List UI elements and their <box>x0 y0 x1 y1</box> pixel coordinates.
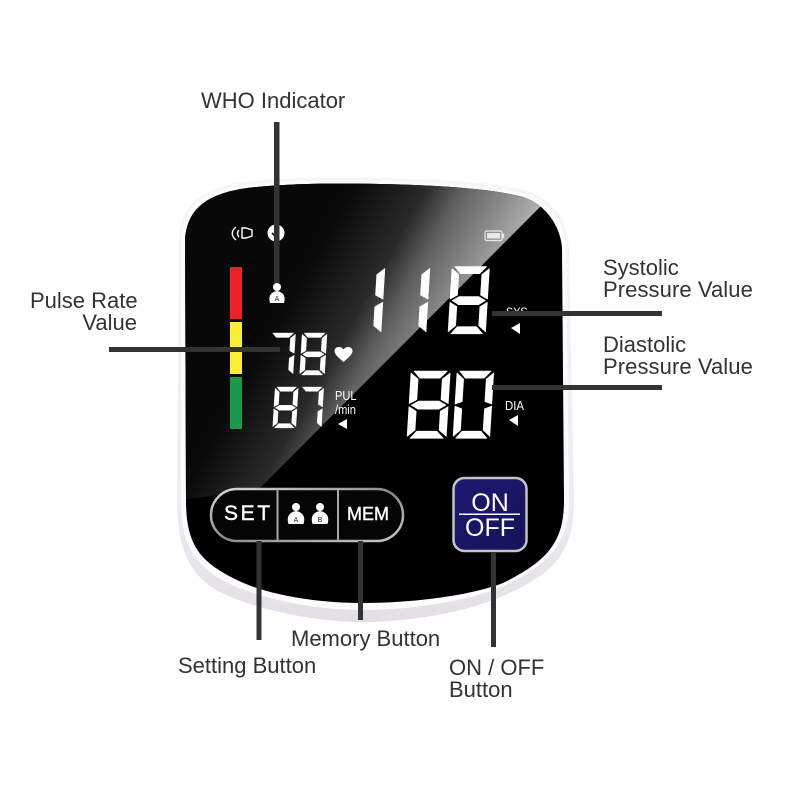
DIA label: DIA <box>505 398 525 413</box>
pulse reading <box>270 333 327 375</box>
PUL per min label: PUL <box>335 388 357 403</box>
button group: SET, user, MEM <box>211 489 403 541</box>
PUL per min label: /min <box>335 402 356 417</box>
callout: Systolic Pressure Value: Systolic <box>603 255 679 280</box>
systolic reading <box>373 266 490 334</box>
callout: ON / OFF Button <box>449 552 544 702</box>
DIA label <box>505 398 525 426</box>
callout: Memory Button <box>291 541 440 651</box>
screen glare <box>180 170 541 500</box>
callout: WHO Indicator <box>201 88 345 283</box>
callout: Setting Button <box>178 541 316 678</box>
icon: speaker <box>232 227 252 240</box>
second reading <box>273 387 324 428</box>
callout: Systolic Pressure Value: Pressure Value <box>603 277 753 302</box>
monitor device <box>177 170 574 622</box>
black screen <box>185 183 564 603</box>
device body <box>177 177 574 622</box>
callout: ON / OFF Button: Button <box>449 677 513 702</box>
SET button: SET <box>224 502 273 525</box>
icon: battery <box>485 231 504 240</box>
callout: Diastolic Pressure Value <box>492 332 753 390</box>
callout: ON / OFF Button: ON / OFF <box>449 655 544 680</box>
icon: users A and B: B <box>318 517 323 524</box>
SYS label: SYS <box>506 307 528 319</box>
callout: WHO Indicator: WHO Indicator <box>201 88 345 113</box>
icon: heart <box>334 347 352 362</box>
icon: user A: A <box>275 296 280 303</box>
callout: Pulse Rate Value: Pulse Rate <box>30 288 138 313</box>
callout: Setting Button: Setting Button <box>178 653 316 678</box>
callout: Diastolic Pressure Value: Pressure Value <box>603 354 753 379</box>
icon: user A <box>269 283 285 303</box>
callout: Pulse Rate Value: Value <box>82 310 137 335</box>
WHO colour scale <box>230 267 242 429</box>
callout: Systolic Pressure Value <box>492 255 753 316</box>
diastolic reading <box>407 371 494 438</box>
icon: check circle <box>268 224 284 242</box>
ON/OFF button: OFF <box>465 514 515 542</box>
icon: users A and B: A <box>294 517 299 524</box>
callout: Pulse Rate Value <box>30 288 280 352</box>
callout: Memory Button: Memory Button <box>291 626 440 651</box>
SYS label <box>506 307 528 334</box>
ON/OFF button: ON <box>471 489 509 517</box>
ON/OFF button <box>454 478 526 551</box>
icon: users A and B <box>288 503 328 524</box>
callout: Diastolic Pressure Value: Diastolic <box>603 332 686 357</box>
inner white rim <box>181 180 569 610</box>
PUL per min label <box>335 388 357 429</box>
MEM button: MEM <box>347 504 389 524</box>
